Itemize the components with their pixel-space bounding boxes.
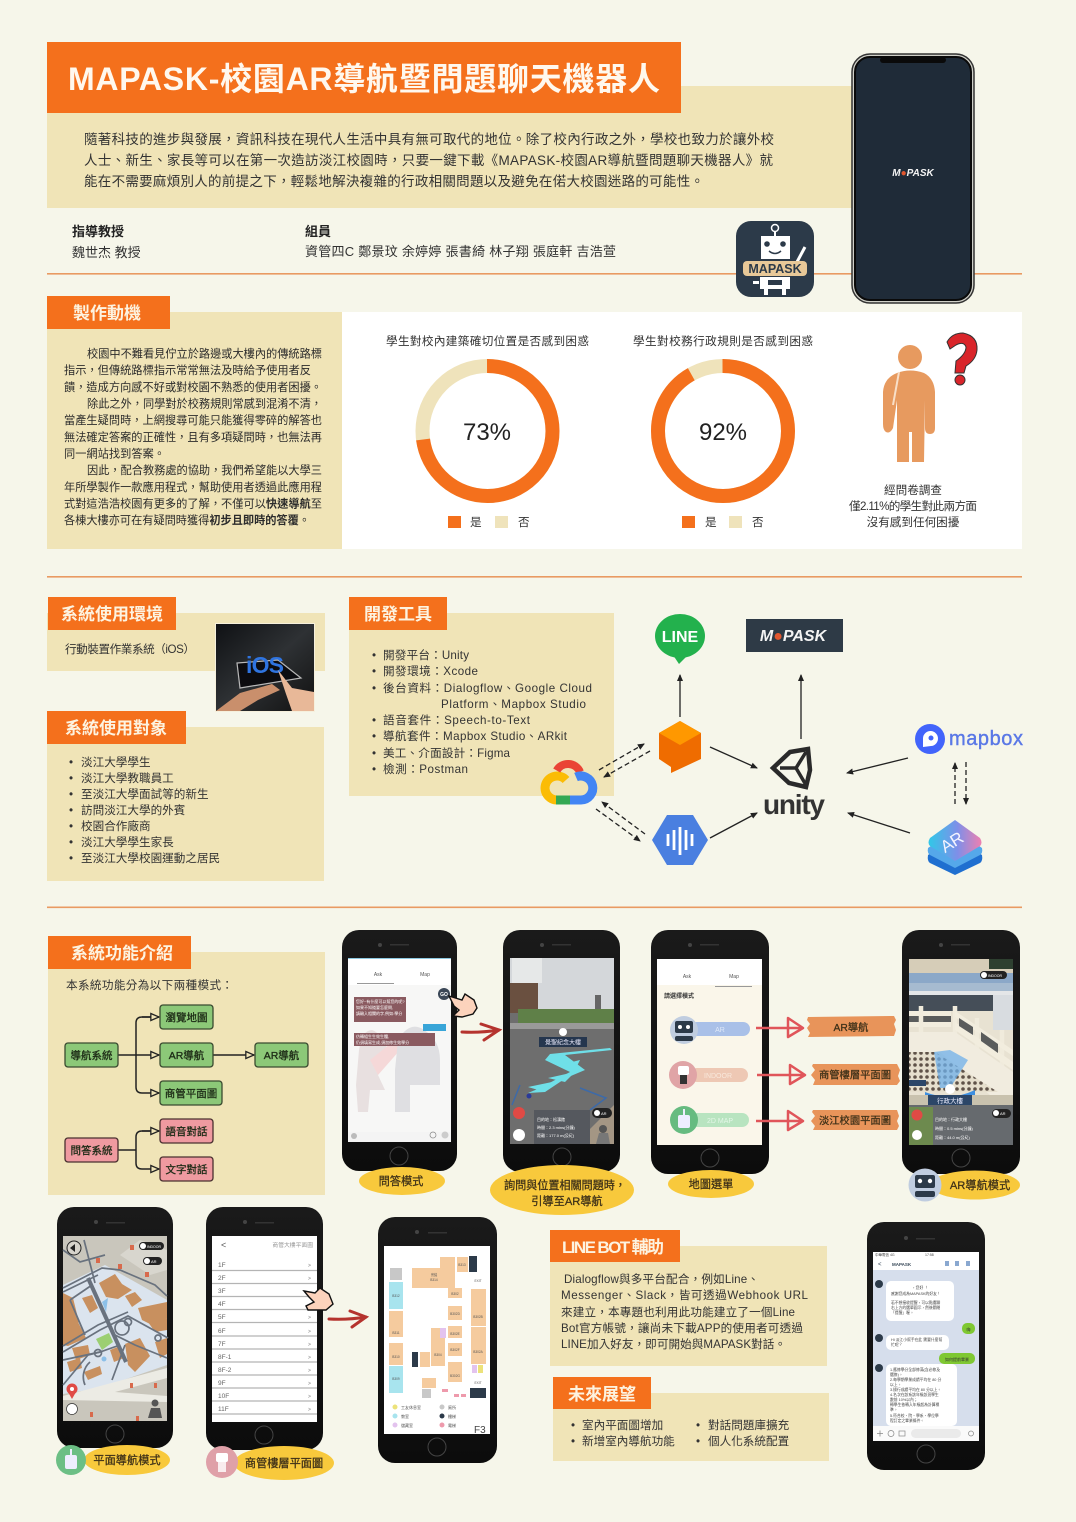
phone: LINE chat: 若不想接收提醒，可以點選聊 — [891, 1300, 941, 1305]
floor legend: 電梯 — [448, 1422, 456, 1428]
floor legend — [392, 1404, 456, 1428]
chart: admin rules donut: 92% — [699, 419, 747, 446]
title banner: MAPASK-校園AR導航暨問題聊天機器人 — [68, 61, 660, 97]
flow node: AR nav result: AR導航 — [264, 1049, 300, 1062]
phone: floor list: > — [308, 1276, 311, 1282]
label: 2D navigation mode — [56, 1445, 170, 1475]
future list: • — [696, 1419, 700, 1432]
arrow: to AR guidance — [462, 1024, 499, 1040]
future list — [571, 1418, 790, 1448]
phone: LINE chat: 17:58 — [925, 1253, 934, 1257]
phone: floor list: 商管大樓平面圖 — [272, 1241, 313, 1249]
icon: mapbox — [915, 724, 1023, 754]
future list: • — [696, 1435, 700, 1448]
label: floor plan: 商管樓層平面圖 — [245, 1456, 323, 1470]
heading: future outlook — [553, 1377, 651, 1409]
phone: floor list: 9F — [218, 1380, 226, 1387]
floor legend: 工友休息室 — [401, 1404, 421, 1410]
hero phone mockup — [852, 54, 974, 303]
phone: floor plan: B302F — [450, 1348, 460, 1352]
phone: floor plan: B313 — [458, 1263, 466, 1267]
menu item: indoor — [669, 1061, 748, 1089]
flow node: text chat — [160, 1157, 213, 1181]
intro text: 隨著科技的進步與發展，資訊科技在現代人生活中具有無可取代的地位。除了校內行政之外，學校也致力於讓外校 — [84, 131, 774, 147]
phone: Q&A mode: Ask — [374, 972, 383, 978]
advisor: 指導教授 — [72, 224, 124, 239]
phone: LINE chat: 右上方的選單圖示，然後關閉 — [891, 1305, 941, 1310]
dev tools list: • — [372, 730, 376, 743]
phone: floor plan: EXIT — [474, 1279, 482, 1283]
flow node: browse map: 瀏覽地圖 — [166, 1011, 208, 1024]
target users list: • — [69, 820, 73, 833]
icon: ARKit — [928, 820, 982, 875]
phone: floor plan: B310 — [392, 1355, 400, 1359]
panel: target users — [47, 711, 324, 881]
phone: LINE chat: 感謝您成為MAPASK的好友！ — [891, 1291, 941, 1296]
phone: LINE chat: 2.每學期學業成績平均在 80 分 — [890, 1377, 941, 1382]
motivation text: 當產生疑問時，上網搜尋可能只能獲得零碎的解答也 — [64, 413, 322, 427]
team members: 資管四C 鄭景玟 余婷婷 張書綺 林子翔 張庭軒 吉浩萱 — [305, 244, 616, 259]
flow node: AR nav — [160, 1043, 213, 1067]
heading: target users: 系統使用對象 — [65, 718, 167, 738]
heading: future outlook: 未來展望 — [568, 1385, 636, 1404]
target users list: • — [69, 852, 73, 865]
phone: map menu: Ask — [683, 974, 692, 980]
phone: floor list: 7F — [218, 1341, 226, 1348]
phone: Q&A mode: Map — [420, 972, 430, 978]
target users list: • — [69, 804, 73, 817]
phone: LINE chat: 1.應修學分全部修滿(含必修及 — [890, 1367, 940, 1372]
floor legend: 教室 — [401, 1413, 409, 1419]
phone: Q&A mode: 請輸入相關的字,例如:學分 — [356, 1010, 402, 1016]
phone: floor list — [206, 1207, 323, 1450]
motivation text: 無法確定答案的正確性，且有多項疑問時，也無法再 — [64, 430, 322, 444]
chart: building location donut: 73% — [463, 419, 511, 446]
motivation text — [64, 346, 322, 527]
target users list: 淡江大學學生家長 — [81, 835, 174, 849]
heading: features: 系統功能介紹 — [71, 943, 173, 963]
menu item: indoor: INDOOR — [704, 1073, 732, 1080]
phone: floor list: 10F — [218, 1393, 229, 1400]
phone: AR guidance: 覺聖紀念大樓 — [545, 1038, 581, 1046]
chart: admin rules donut: 否 — [752, 516, 764, 529]
team members — [305, 224, 616, 259]
heading: LINE Bot: LINE BOT 輔助 — [562, 1238, 664, 1257]
phone: AR navigation: 時間：0.5 mins(分鐘) — [935, 1125, 973, 1131]
phone: floor plan: B302D — [450, 1312, 461, 1316]
heading: LINE Bot — [550, 1230, 680, 1262]
phone: LINE chat — [867, 1222, 985, 1470]
menu item: AR — [670, 1016, 750, 1044]
motivation text: 指示，但傳統路標指示常常無法及時給予使用者反 — [64, 363, 311, 377]
motivation text: 因此，配合教務處的協助，我們希望能以大學三 — [87, 463, 322, 477]
phone: map menu: 請選擇模式 — [664, 992, 694, 1000]
future list: • — [571, 1435, 575, 1448]
dev tools list: • — [372, 714, 376, 727]
phone: floor plan: B302E — [450, 1332, 460, 1336]
flow node: floor plan: 商管平面圖 — [165, 1087, 217, 1100]
intro text — [84, 131, 774, 189]
phone: AR navigation — [902, 930, 1020, 1174]
survey note — [849, 483, 977, 529]
phone: floor list: > — [308, 1329, 311, 1335]
icon: iOS image: iOS — [246, 652, 284, 678]
option: campus map — [811, 1110, 899, 1130]
LINE Bot text: LINE加入好友，即可開始與MAPASK對話。 — [561, 1337, 786, 1351]
phone: AR navigation: 目的地：行政大樓 — [935, 1116, 967, 1122]
survey note: 沒有感到任何困擾 — [867, 515, 960, 529]
heading: environment — [48, 597, 176, 630]
phone: 2D map: AR — [151, 1259, 157, 1264]
label: map menu: 地圖選單 — [689, 1178, 733, 1191]
phone: floor plan: B302A — [473, 1350, 484, 1354]
target users list: • — [69, 756, 73, 769]
dev tools list: • — [372, 763, 376, 776]
phone: floor plan: 會議 — [431, 1272, 438, 1277]
flowchart connectors — [118, 1017, 254, 1169]
chart: building location donut — [386, 334, 589, 529]
phone: 2D map: INDOOR — [147, 1245, 161, 1249]
phone: Q&A mode: 仍須填寫生成,須加修生效學分 — [356, 1039, 409, 1045]
menu item: 2D map — [670, 1106, 749, 1134]
flow node: Q&A system: 問答系統 — [70, 1144, 113, 1157]
dev tools list: 美工、介面設計：Figma — [383, 746, 511, 760]
phone: LINE chat: 5.符合校、院、學系、學位學 — [890, 1413, 939, 1418]
motivation text: 各棟大樓亦可在有疑問時獲得初步且即時的答覆。 — [64, 513, 310, 527]
dev tools list: 後台資料：Dialogflow、Google Cloud — [383, 681, 592, 695]
flow node: AR nav result — [255, 1043, 308, 1067]
phone: floor plan: B302B — [473, 1315, 483, 1319]
phone: floor plan: B311 — [392, 1331, 400, 1335]
phone: Q&A mode: 您好~有什麼可以幫您的呢? — [356, 998, 405, 1004]
icon: ARKit: AR — [937, 828, 967, 857]
advisor: 魏世杰 教授 — [72, 245, 141, 260]
panel: dev tools — [349, 597, 614, 796]
label: location question: 詢問與位置相關問題時， — [504, 1178, 626, 1192]
phone: floor list: 1F — [218, 1262, 226, 1269]
phone: floor list: > — [308, 1368, 311, 1374]
phone: floor list: 8F-1 — [218, 1354, 232, 1361]
phone: map menu: Map — [729, 974, 739, 980]
panel: features — [48, 936, 325, 1195]
phone: floor list: < — [221, 1240, 226, 1250]
phone: floor list: 11F — [218, 1406, 229, 1413]
label: location question — [490, 1165, 634, 1215]
target users list: 淡江大學教職員工 — [81, 771, 174, 785]
dev tools list: • — [372, 665, 376, 678]
LINE Bot text: Bot官方帳號，讓尚未下載APP的使用者可透過 — [561, 1321, 803, 1335]
phone: floor list: > — [308, 1342, 311, 1348]
phone: floor list: 8F-2 — [218, 1367, 232, 1374]
floor legend: 廁所 — [448, 1404, 456, 1410]
phone: map menu — [651, 930, 769, 1174]
heading: environment: 系統使用環境 — [61, 604, 163, 624]
flow node: browse map — [160, 1005, 213, 1029]
survey note: 經問卷調查 — [884, 483, 942, 497]
icon: MAPASK badge: M●PASK — [760, 628, 828, 645]
intro text: 能在不需要麻煩別人的前提之下，輕鬆地解決複雜的行政相關問題以及避免在偌大校園迷路的可能性。 — [84, 173, 704, 189]
phone: AR navigation: AR — [1000, 1111, 1006, 1116]
chart: admin rules donut: 是 — [705, 516, 717, 529]
icon: MAPASK robot logo — [736, 221, 814, 297]
target users list: • — [69, 788, 73, 801]
phone: floor plan: F3 — [474, 1425, 486, 1436]
floor legend: 儲藏室 — [401, 1422, 413, 1428]
icon: green robot — [56, 1445, 86, 1475]
option: campus map: 淡江校園平面圖 — [819, 1114, 891, 1127]
icon: LINE — [655, 614, 705, 664]
target users list: • — [69, 836, 73, 849]
phone: LINE chat: 程訂定之畢業條件。 — [890, 1418, 924, 1423]
future list: 個人化系統配置 — [708, 1434, 789, 1448]
label: map menu — [668, 1170, 754, 1198]
dev tools list: 語音套件：Speech-to-Text — [383, 713, 531, 727]
phone: LINE chat: ，您好 ！ — [912, 1285, 928, 1290]
icon: Speech-to-Text — [652, 815, 708, 865]
heading: target users — [47, 711, 186, 744]
phone: AR navigation: 距離：44.0 m(公尺) — [935, 1134, 971, 1140]
panel: environment — [47, 597, 325, 671]
heading: motivation — [47, 296, 170, 329]
icon: Google Cloud — [545, 764, 593, 800]
target users list: • — [69, 772, 73, 785]
future list: 室內平面圖增加 — [582, 1418, 663, 1432]
icon: Unity: unity — [763, 789, 825, 820]
dev tools list: • — [372, 649, 376, 662]
phone: LINE chat: 忙呢？ — [891, 1342, 902, 1347]
target users list: 校園合作廠商 — [81, 819, 151, 833]
title banner — [47, 42, 681, 113]
phone: LINE chat: Hi 淡江小幫手在此 需要什麼幫 — [891, 1337, 942, 1342]
phone: LINE chat: 準。 — [890, 1407, 898, 1412]
future list: • — [571, 1419, 575, 1432]
dev tools list: • — [372, 682, 376, 695]
icon: blue robot — [908, 1168, 942, 1202]
chart: building location donut: 否 — [518, 516, 530, 529]
icon: pointing hand — [449, 994, 477, 1017]
icon: MAPASK badge — [746, 619, 843, 652]
future list: 對話問題庫擴充 — [708, 1418, 790, 1432]
phone: floor plan: B302G — [450, 1374, 460, 1378]
phone: LINE chat: 中華電信 4G — [875, 1252, 895, 1257]
phone: LINE chat: < — [878, 1262, 882, 1268]
flow node: Q&A system — [65, 1138, 118, 1162]
flow node: nav system: 導航系統 — [70, 1049, 113, 1062]
phone: floor list: > — [308, 1394, 311, 1400]
menu item: AR: AR — [715, 1027, 725, 1034]
phone: Q&A mode: GO — [440, 992, 448, 998]
icon: iOS image — [215, 623, 315, 712]
chart: admin rules donut: 學生對校務行政規則是否感到困惑 — [633, 334, 813, 348]
phone: LINE chat: 4.名次在該系該年級該班學生 — [890, 1392, 939, 1397]
icon: pink robot — [206, 1446, 238, 1478]
intro text: 人士、新生、家長等可以在第一次造訪淡江校園時，只要一鍵下載《MAPASK-校園AR導航暨問題聊天機器人》就 — [84, 152, 774, 168]
dev tools list: Platform、Mapbox Studio — [441, 698, 586, 711]
phone: LINE chat: 轉學生依轉入年級起為計算標 — [890, 1402, 940, 1407]
icon: LINE: LINE — [662, 629, 699, 646]
option: floor plan: 商管樓層平面圖 — [819, 1068, 891, 1082]
phone: AR navigation: INDOOR — [988, 974, 1002, 978]
phone: LINE chat: 3.操行成績平均在 80 分以上。 — [890, 1387, 941, 1392]
phone: floor list: 3F — [218, 1288, 226, 1295]
option: floor plan — [811, 1064, 900, 1085]
heading: dev tools: 開發工具 — [364, 605, 432, 624]
phone: LINE chat: 數前 10%以內； — [890, 1397, 918, 1402]
intro panel — [47, 86, 852, 208]
flow node: voice chat: 語音對話 — [166, 1125, 208, 1138]
phone: Q&A mode — [342, 930, 457, 1171]
dev tools list: 檢測：Postman — [383, 762, 468, 776]
team members: 組員 — [305, 224, 331, 239]
motivation text: 同一網站找到答案。 — [64, 446, 165, 460]
label: AR navigation mode — [908, 1168, 1020, 1202]
phone: AR guidance: 距離：177.0 m(公尺) — [537, 1132, 575, 1138]
phone: floor list: > — [308, 1355, 311, 1361]
floor legend: 樓梯 — [448, 1413, 456, 1419]
phone: LINE chat: 「提醒」喔。 — [891, 1310, 914, 1315]
option: AR navigation — [807, 1016, 896, 1037]
hero phone mockup: M●PASK — [892, 168, 934, 179]
motivation text: 年所學製作一款應用程式，幫助使用者透過此應用程 — [64, 480, 322, 494]
phone: floor list: > — [308, 1381, 311, 1387]
heading: dev tools — [349, 597, 447, 630]
target users list: 至淡江大學校園運動之居民 — [81, 851, 220, 865]
flow node: AR nav: AR導航 — [169, 1049, 205, 1062]
phone: floor list: 4F — [218, 1301, 226, 1308]
panel: survey results — [342, 312, 1022, 549]
phone: 2D map — [57, 1207, 173, 1448]
flow node: voice chat — [160, 1119, 213, 1143]
phone: Q&A mode: 如果不知道要怎麼問, — [356, 1004, 393, 1010]
icon: mapbox: mapbox — [949, 728, 1023, 750]
icon: Dialogflow — [659, 721, 701, 773]
LINE Bot text: Dialogflow與多平台配合，例如Line、 — [564, 1272, 759, 1286]
option: AR navigation: AR導航 — [834, 1021, 868, 1034]
label: AR navigation mode: AR導航模式 — [950, 1178, 1010, 1192]
flow node: text chat: 文字對話 — [166, 1163, 208, 1176]
target users list: 訪問淡江大學的外賓 — [81, 803, 185, 817]
motivation text: 校園中不難看見佇立於路邊或大樓內的傳統路標 — [87, 346, 322, 360]
motivation text: 式對這浩浩校園有更多的了解，不僅可以快速導航至 — [64, 496, 322, 510]
icon: MAPASK robot logo: MAPASK — [748, 262, 802, 276]
icon: Unity — [763, 749, 825, 820]
heading: motivation: 製作動機 — [73, 304, 141, 323]
chart: building location donut: 是 — [470, 516, 482, 529]
flow node: floor plan — [160, 1081, 222, 1105]
advisor — [72, 224, 141, 260]
label: floor plan — [206, 1446, 334, 1480]
architecture diagram — [545, 614, 1023, 875]
phone: LINE chat: 選修)。 — [890, 1372, 903, 1377]
phone: floor plan: B314 — [430, 1278, 438, 1282]
target users list: 淡江大學學生 — [81, 755, 151, 769]
phone: LINE chat: 嗨 — [966, 1326, 970, 1332]
LINE Bot text: Messenger、Slack，皆可透過Webhook URL — [561, 1288, 809, 1302]
arrows between tools — [596, 675, 966, 841]
phone: Q&A mode: 仿轉組生生效生體, — [356, 1033, 389, 1039]
phone: floor list: 5F — [218, 1314, 226, 1321]
label: location question: 引導至AR導航 — [531, 1194, 603, 1208]
phone: floor plan: B309 — [392, 1377, 400, 1381]
phone: AR guidance — [503, 930, 620, 1172]
dev tools list — [372, 648, 592, 776]
phone: floor list: > — [308, 1315, 311, 1321]
phone: LINE chat: 如何提前畢業 — [945, 1356, 969, 1362]
phone: LINE chat: 以上。 — [890, 1382, 901, 1387]
panel: motivation — [47, 296, 342, 549]
phone: floor plan: B312 — [392, 1294, 400, 1298]
menu item: 2D map: 2D MAP — [707, 1118, 733, 1125]
motivation text: 饋，造成方向感不好或對校園不熟悉的使用者困擾。 — [64, 380, 322, 394]
dev tools list: • — [372, 747, 376, 760]
target users list — [69, 755, 220, 865]
motivation text: 除此之外，同學對於校務規則常感到混淆不清， — [87, 396, 322, 410]
LINE Bot text — [561, 1272, 809, 1351]
LINE Bot text: 來建立，本專題也利用此功能建立了一個Line — [561, 1305, 795, 1319]
phone: floor list: 2F — [218, 1275, 226, 1282]
phone: floor list: 6F — [218, 1328, 226, 1335]
survey note: 僅2.11%的學生對此兩方面 — [849, 499, 977, 513]
target users list: 至淡江大學面試等的新生 — [81, 787, 209, 801]
flow node: nav system — [65, 1043, 118, 1067]
panel: future outlook — [553, 1377, 829, 1461]
dev tools list: 開發環境：Xcode — [383, 664, 478, 678]
arrow: to floor plan — [329, 1311, 366, 1327]
phone: floor list: > — [308, 1263, 311, 1269]
label: Q&A mode: 問答模式 — [379, 1174, 423, 1188]
phone: AR navigation: 行政大樓 — [937, 1096, 964, 1105]
icon: confused student — [883, 333, 977, 462]
phone: floor plan: B302 — [451, 1292, 459, 1296]
phone: floor list: > — [308, 1407, 311, 1413]
dev tools list: 導航套件：Mapbox Studio、ARkit — [383, 729, 568, 743]
phone: LINE chat: MAPASK — [892, 1262, 912, 1267]
icon: pointing hand — [304, 1288, 333, 1310]
phone: AR guidance: 時間：2.3 mins(分鐘) — [537, 1124, 575, 1130]
dev tools list: 開發平台：Unity — [383, 648, 469, 662]
heading: features — [48, 936, 191, 969]
panel: LINE Bot — [550, 1230, 827, 1366]
arrows: menu to options — [756, 1018, 805, 1130]
label: 2D navigation mode: 平面導航模式 — [93, 1453, 161, 1467]
phone: AR guidance: 目的地：松濤館 — [537, 1116, 565, 1122]
future list: 新增室內導航功能 — [582, 1434, 675, 1448]
chart: building location donut: 學生對校內建築確切位置是否感到困惑 — [386, 334, 589, 348]
label: Q&A mode — [359, 1167, 445, 1195]
phone: floor plan: EXIT — [474, 1381, 482, 1385]
environment text: 行動裝置作業系統（iOS） — [65, 642, 195, 656]
phone: floor plan — [378, 1217, 497, 1463]
chart: admin rules donut — [633, 334, 813, 529]
phone: floor plan: B304 — [434, 1353, 442, 1357]
features intro: 本系統功能分為以下兩種模式： — [66, 978, 233, 992]
phone: AR guidance: AR — [601, 1111, 607, 1116]
